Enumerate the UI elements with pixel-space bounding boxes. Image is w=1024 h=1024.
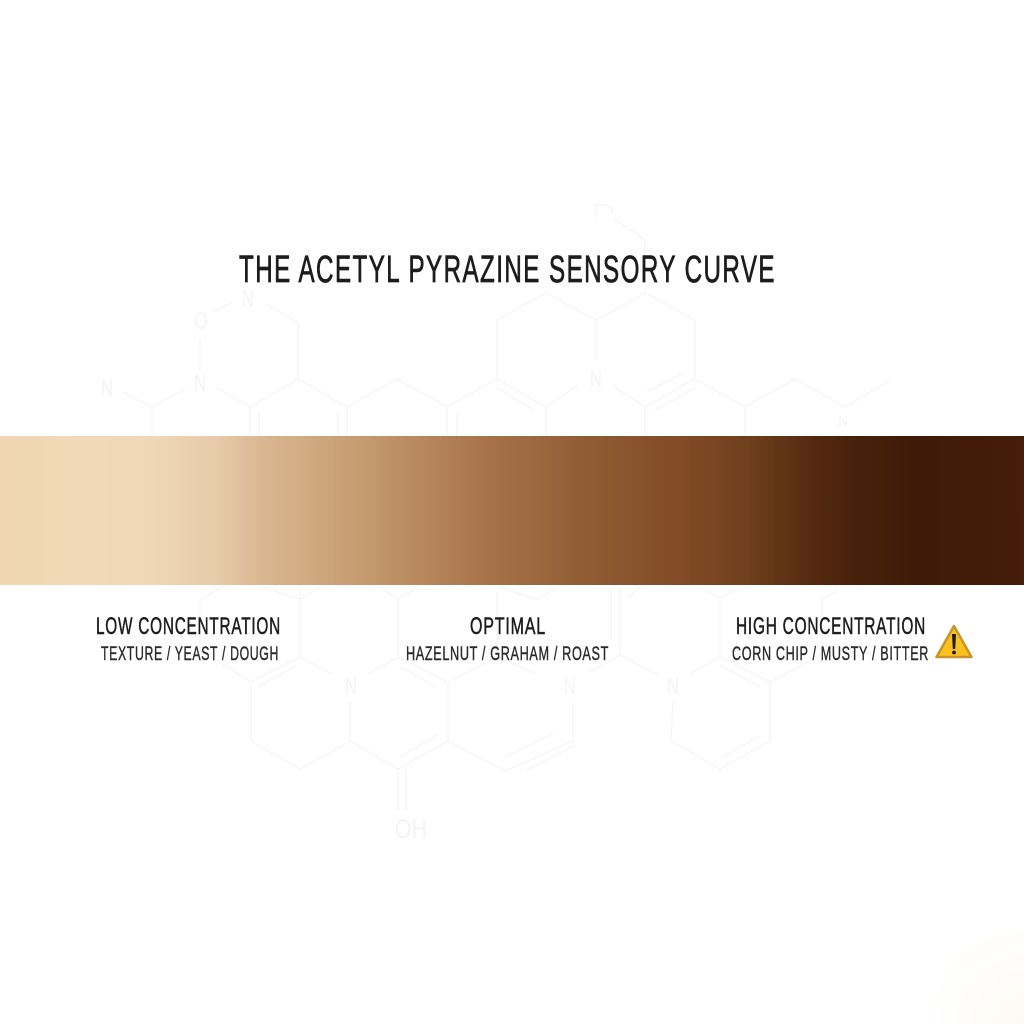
label: optimal: HAZELNUT / GRAHAM / ROAST (406, 644, 609, 665)
label: high concentration: HIGH CONCENTRATION (736, 613, 926, 640)
label: low concentration (96, 613, 281, 665)
label: high concentration: CORN CHIP / MUSTY / BITTER (732, 644, 929, 665)
gradient bar: concentration scale (0, 436, 1024, 585)
molecule watermark: lower structure (200, 587, 838, 845)
molecule watermark: upper structure (101, 205, 892, 436)
molecule watermark: lower structure: N (564, 673, 576, 700)
molecule watermark: upper structure: O (194, 308, 208, 335)
molecule watermark: lower structure: OH (395, 815, 427, 845)
label: high concentration (732, 613, 929, 665)
icon: warning triangle (936, 626, 972, 657)
molecule watermark: upper structure: N (101, 375, 113, 402)
label: optimal: OPTIMAL (470, 613, 546, 640)
molecule watermark: lower structure: N (667, 673, 679, 700)
molecule watermark: upper structure: N (838, 413, 848, 429)
molecule watermark: upper structure: N (194, 370, 206, 397)
molecule watermark: upper structure: N (242, 286, 254, 313)
molecule watermark: lower structure: N (345, 673, 357, 700)
label: low concentration: LOW CONCENTRATION (96, 613, 281, 640)
label: low concentration: TEXTURE / YEAST / DOUGH (101, 644, 279, 665)
label: optimal (406, 613, 609, 665)
molecule watermark: upper structure: N (590, 366, 602, 393)
